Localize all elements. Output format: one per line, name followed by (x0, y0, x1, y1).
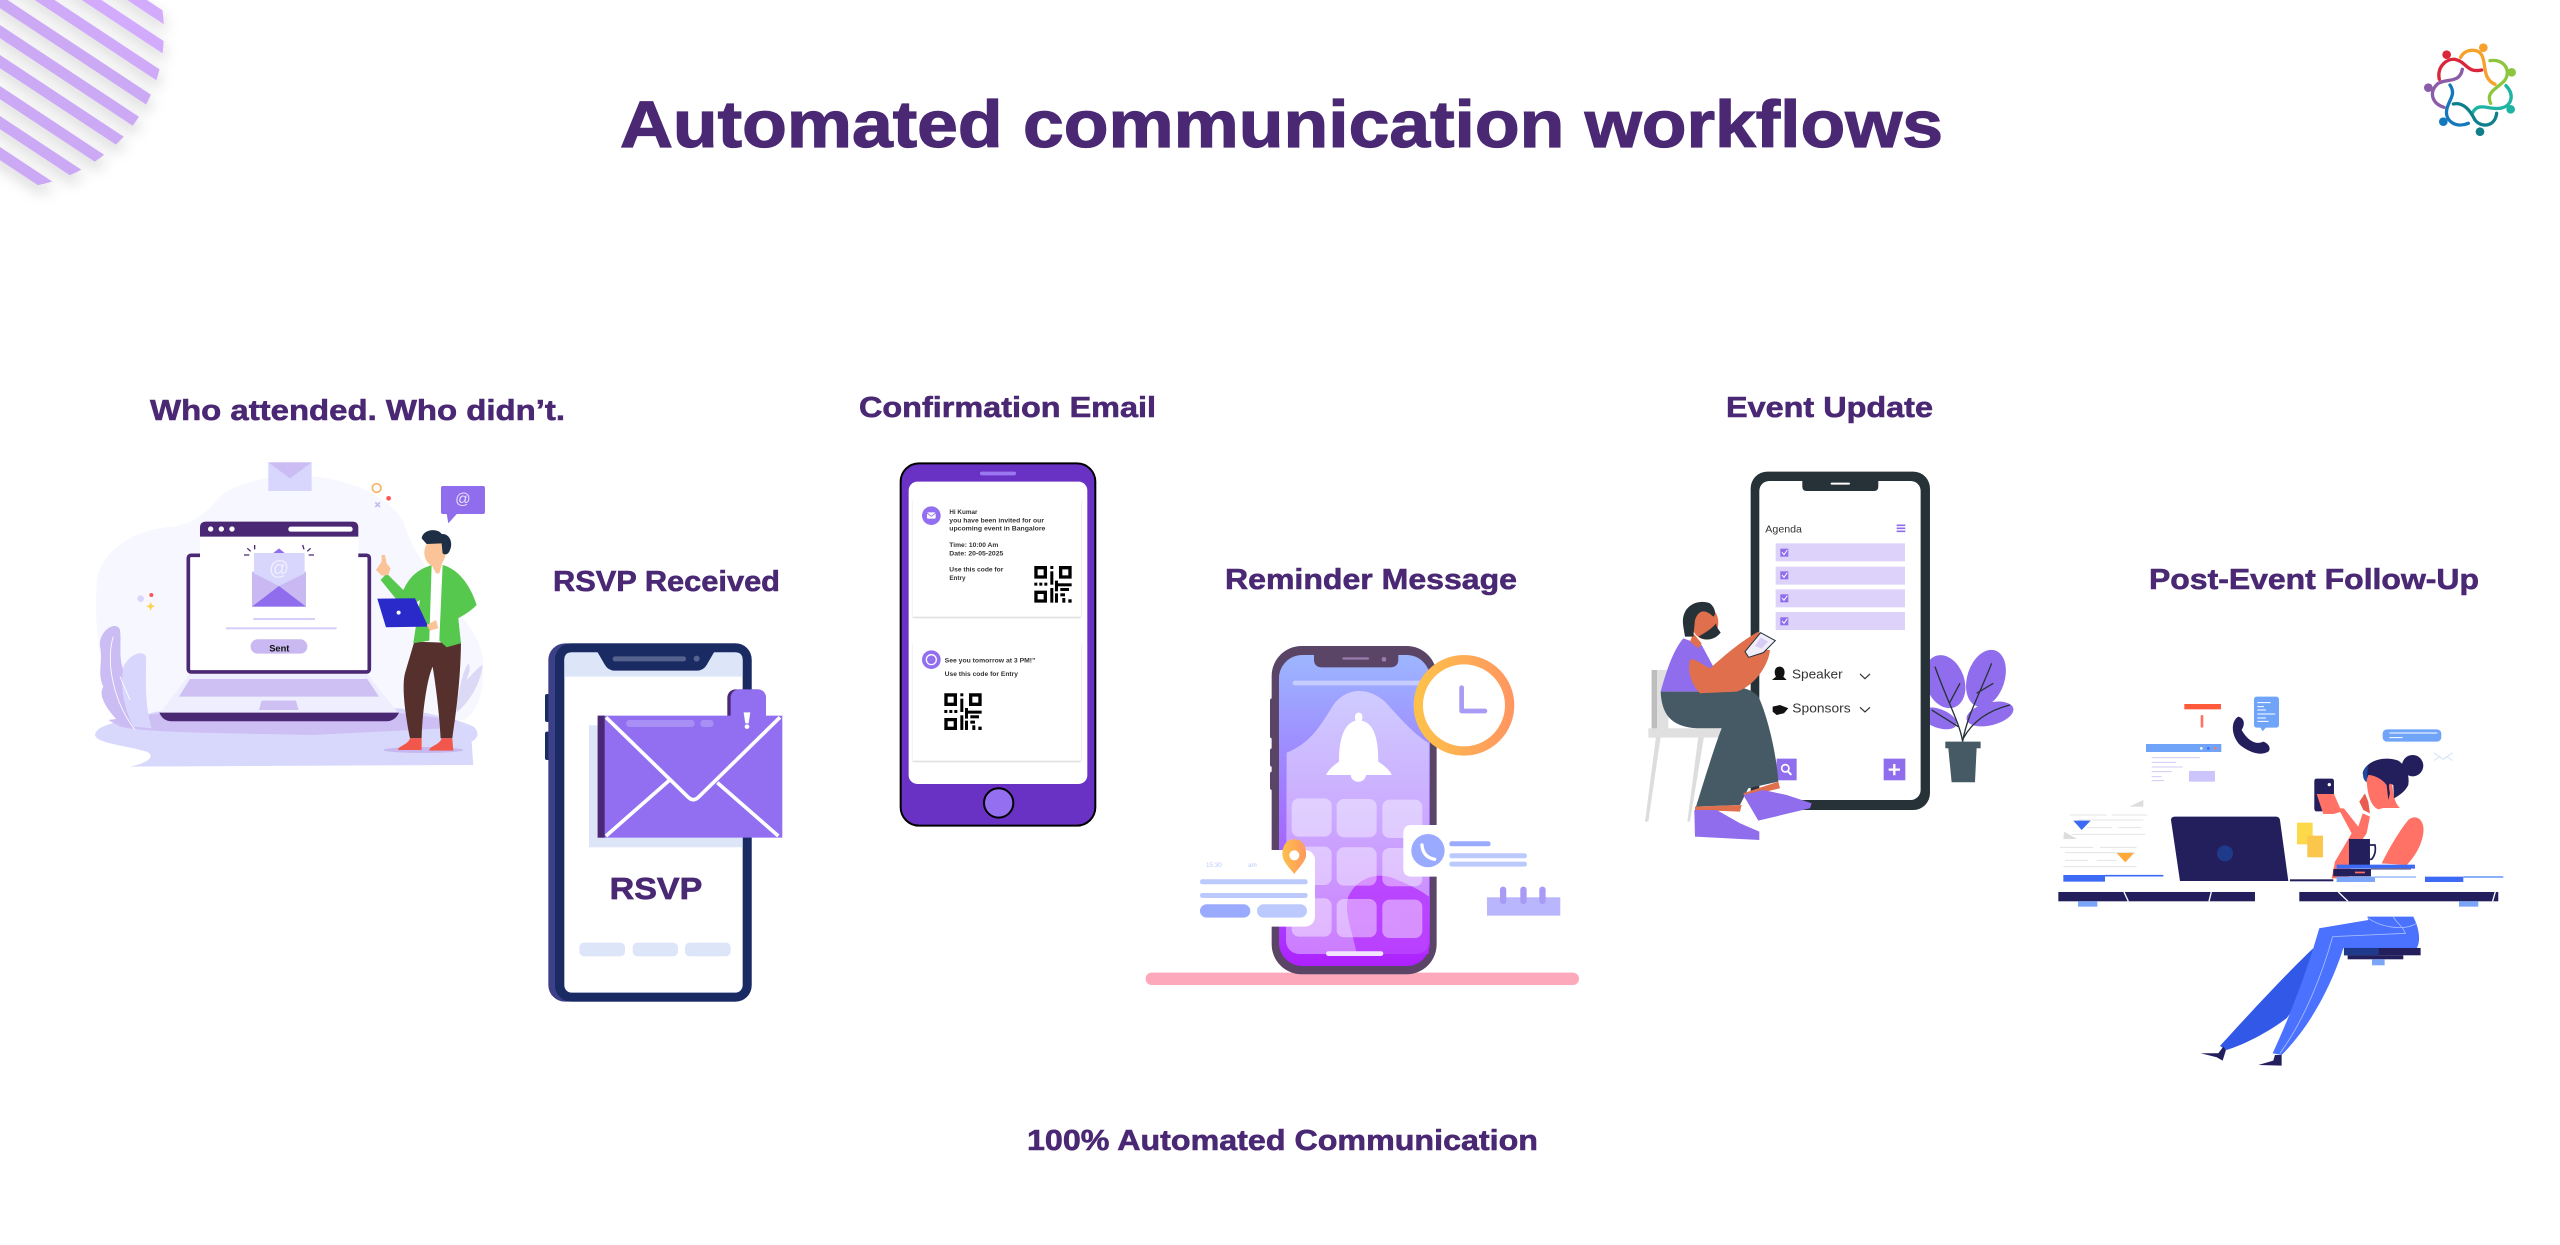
illustration: confirmation email phone: Use this code for (949, 567, 1004, 574)
heading: Post-Event Follow-Up: Post-Event Follow-Up (2149, 564, 2479, 596)
illustration: reminder phone with bell and clock (1146, 646, 1579, 985)
illustration: reminder phone with bell and clock: am (1248, 862, 1257, 869)
illustration: confirmation email phone: Time: 10:00 Am (949, 542, 999, 549)
heading: Event Update: Event Update (1726, 392, 1933, 424)
illustration: confirmation email phone: Use this code for Entry (945, 671, 1018, 678)
illustration: confirmation email phone: upcoming event in Bangalore (949, 526, 1046, 533)
illustration: RSVP phone with envelope: RSVP (610, 872, 702, 906)
illustration: event update agenda phone with woman: Sponsors (1792, 702, 1851, 716)
heading: Who attended: Who attended. Who didn’t. (150, 395, 565, 427)
heading: Reminder Message: Reminder Message (1225, 564, 1517, 596)
illustration: post-event follow-up woman at desk (2058, 697, 2503, 1066)
illustration: reminder phone with bell and clock: 15:30 (1206, 862, 1222, 869)
illustration: confirmation email phone: you have been invited for our (949, 517, 1045, 524)
illustration: confirmation email phone: Hi Kumar (949, 509, 978, 516)
decorative striped circle (0, 0, 168, 196)
illustration: confirmation email phone: See you tomorrow at 3 PM!" (945, 657, 1035, 664)
illustration: confirmation email phone (901, 463, 1095, 826)
illustration: email sent laptop with man: @ (455, 491, 471, 508)
title: Automated communication workflows (620, 87, 1943, 161)
illustration: confirmation email phone: Entry (949, 575, 966, 582)
illustration: event update agenda phone with woman (1645, 472, 2016, 840)
illustration: RSVP phone with envelope (545, 643, 782, 1002)
illustration: confirmation email phone: Date: 20-05-2025 (949, 550, 1004, 557)
illustration: email sent laptop with man: @ (269, 558, 289, 580)
heading: RSVP Received: RSVP Received (553, 566, 780, 598)
illustration: event update agenda phone with woman: Speaker (1792, 668, 1843, 682)
logo: ring of people (2424, 43, 2516, 136)
illustration: email sent laptop with man (95, 462, 485, 767)
illustration: email sent laptop with man: Sent (269, 643, 289, 653)
illustration: event update agenda phone with woman: Agenda (1765, 525, 1803, 536)
footer tagline: 100% Automated Communication (1027, 1125, 1538, 1157)
heading: Confirmation Email: Confirmation Email (859, 392, 1156, 424)
